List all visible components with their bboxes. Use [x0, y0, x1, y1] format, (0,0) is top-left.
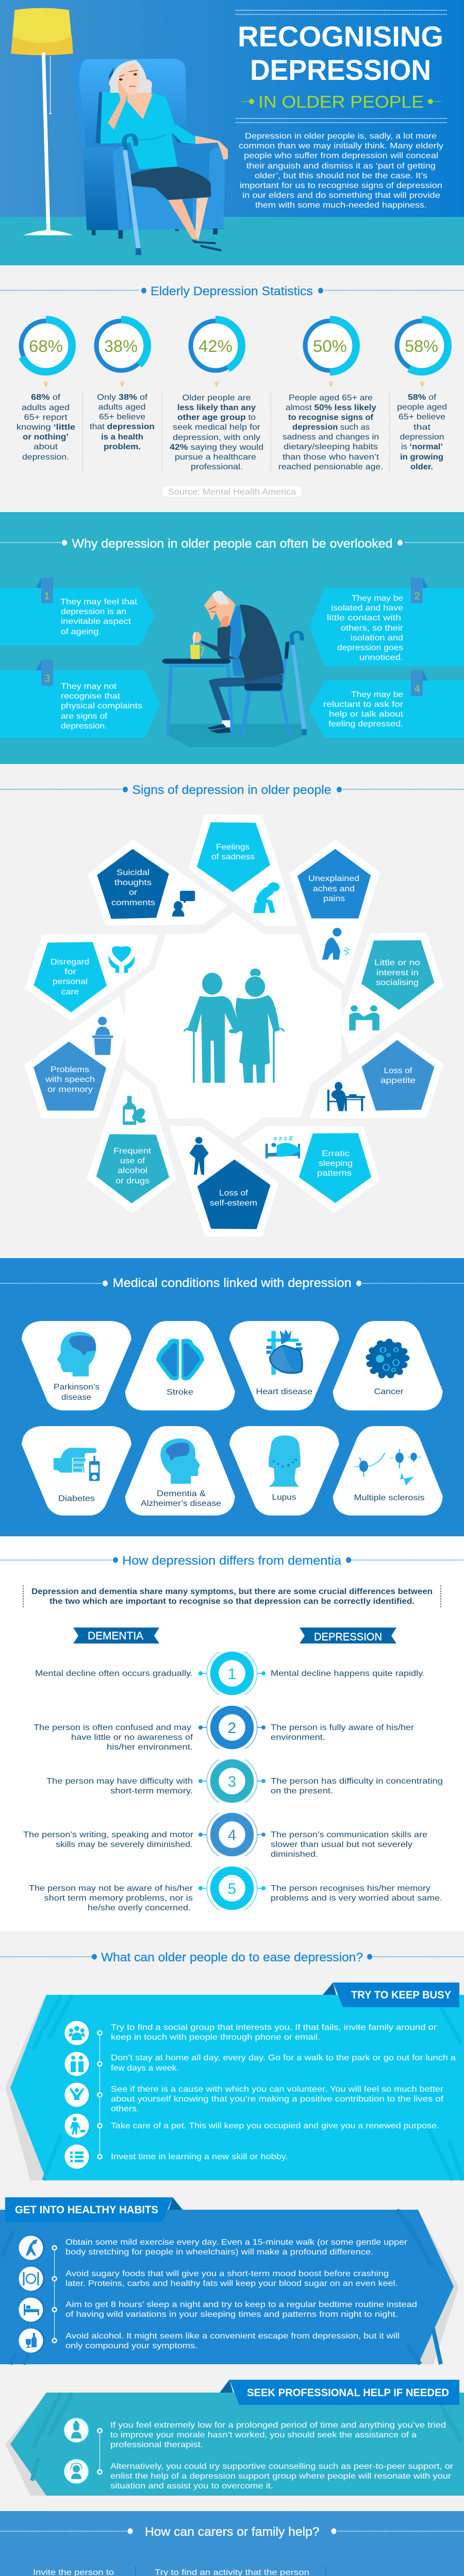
- stat text 2: problem.: [104, 443, 141, 451]
- reason 3 banner: 3: [45, 673, 50, 684]
- difference marker 2: 2: [228, 1720, 236, 1737]
- icon: counsellor with headset: [64, 2459, 90, 2484]
- dementia column text: short term memory problems, nor is: [44, 1894, 193, 1903]
- stat ring 68%: 68%: [29, 337, 63, 355]
- dementia ribbon: DEMENTIA: [88, 1630, 143, 1642]
- icon: walking companions: [65, 2052, 90, 2076]
- seek help tips: situation and assist you to overcome it.: [110, 2482, 273, 2490]
- stat text 1: about: [34, 443, 58, 451]
- intro paragraph: older’, but this should not be the case. It’s: [255, 172, 427, 180]
- reason 2 banner: isolated and have: [331, 604, 403, 613]
- icon: volunteer: [65, 2082, 90, 2107]
- reason 4 banner: help or talk about: [329, 710, 404, 719]
- stat text 4: depression such as: [292, 423, 370, 432]
- reason 3 banner: [0, 660, 160, 738]
- reason 4 banner: reluctant to ask for: [323, 700, 404, 709]
- medical condition labels: [54, 1383, 425, 1508]
- stat ring 58%: [395, 319, 448, 372]
- stat text 1: adults aged: [22, 403, 70, 412]
- dementia column text: have little or no awareness of: [71, 1733, 193, 1742]
- sign labels: of sadness: [211, 853, 255, 861]
- intro paragraph: Depression in older people is, sadly, a lot more: [245, 132, 437, 141]
- medical condition labels: Lupus: [272, 1493, 296, 1502]
- depression column text: The person’s communication skills are: [271, 1831, 427, 1839]
- sign labels: comments: [111, 899, 155, 907]
- intro paragraph: common than we may initially think. Many elderly: [239, 142, 443, 150]
- heading: elderly depression statistics: Elderly Depression Statistics: [151, 284, 313, 298]
- keep busy tips: keep in touch with people through phone or email.: [111, 2033, 320, 2042]
- depression column text: environment.: [271, 1733, 325, 1742]
- card: heart disease: [229, 1321, 339, 1411]
- sign labels: appetite: [380, 1076, 416, 1085]
- reason 4 banner: [309, 670, 464, 738]
- centre tile with older couple: [125, 912, 342, 1140]
- timeline nodes: [98, 2031, 102, 2159]
- reason 1 banner: inevitable aspect: [61, 617, 131, 626]
- header: title: [236, 10, 447, 123]
- medical condition labels: disease: [61, 1393, 91, 1402]
- stat text 4: sadness and changes in: [283, 433, 379, 442]
- seek help tips: enlist the help of a depression support group where people will resonate with your: [110, 2472, 452, 2481]
- source label: Source: Mental Health America: [168, 487, 296, 497]
- sign labels: Loss of: [384, 1066, 412, 1075]
- medical condition labels: Multiple sclerosis: [354, 1494, 425, 1502]
- keep busy tips: about yourself knowing that you’re making a positive contribution to the lives of: [111, 2095, 444, 2104]
- stat text 1: knowing ‘little: [16, 423, 75, 432]
- healthy habit tips: of having wild variations in your sleeping times and patterns from night to night.: [65, 2310, 398, 2319]
- sign labels: self-esteem: [210, 1199, 257, 1208]
- reason 2 banner: little contact with: [327, 614, 401, 622]
- reason 2 banner: depression goes: [337, 643, 403, 652]
- healthy habit tips: Obtain some mild exercise every day. Even a 15-minute walk (or some gentle upper: [65, 2238, 408, 2247]
- difference marker 3: [198, 1759, 266, 1803]
- stat text 3: 42% saying they would: [170, 443, 263, 452]
- stat text 1: 65+ report: [24, 413, 68, 422]
- intro statement: Depression and dementia share many symptoms, but there are some crucial differences between: [31, 1587, 433, 1596]
- depression column text: The person is fully aware of his/her: [271, 1723, 415, 1732]
- stat text 5: 65+ believe: [399, 413, 445, 421]
- heading: why overlooked: Why depression in older people can often be overlooked: [72, 537, 393, 551]
- reason 2 banner: [309, 578, 464, 666]
- icon: walking a pet: [65, 2113, 90, 2138]
- stat ring 42%: [189, 319, 242, 372]
- depression ribbon: DEPRESSION: [314, 1631, 382, 1643]
- dementia column text: [23, 1669, 194, 1912]
- intro paragraph: [239, 132, 443, 210]
- reason 1 banner: [0, 578, 155, 646]
- sign labels: with speech: [45, 1075, 95, 1084]
- timeline nodes: [53, 2246, 57, 2343]
- dementia column text: he/she overly concerned.: [88, 1904, 191, 1912]
- healthy habit tips: later. Proteins, carbs and healthy fats will keep your blood sugar on an even keel.: [65, 2279, 398, 2288]
- sign labels: Loss of: [219, 1189, 248, 1197]
- sign: loss of self-esteem: [169, 1126, 279, 1237]
- difference marker 3: 3: [228, 1773, 236, 1790]
- icon: therapist: [64, 2417, 90, 2443]
- stat text 1: or nothing’: [23, 433, 69, 442]
- healthy habit tips: Avoid sugary foods that will give you a short-term mood boost before crashing: [65, 2269, 389, 2278]
- sign: loss of appetite: [309, 1032, 443, 1118]
- reason 2 banner: unnoticed.: [359, 653, 403, 662]
- seek help tips: [110, 2421, 454, 2490]
- healthy habit tips: Avoid alcohol. It might seem like a convenient escape from depression, but it will: [65, 2332, 400, 2341]
- healthy habit tips: Aim to get 8 hours’ sleep a night and try to keep to a regular bedtime routine instead: [65, 2300, 417, 2309]
- sign labels: alcohol: [118, 1166, 147, 1175]
- sign labels: Feelings: [216, 843, 250, 852]
- stat text 5: in growing: [400, 453, 443, 462]
- sign labels: Erratic: [322, 1149, 350, 1158]
- medical condition labels: Dementia &: [157, 1489, 206, 1498]
- keep busy tips: Try to find a social group that interests you. If that fails, invite family around or: [111, 2023, 437, 2032]
- stat text 3: less likely than any: [177, 403, 256, 412]
- depression column text: Mental decline happens quite rapidly.: [271, 1669, 425, 1678]
- difference marker 4: 4: [228, 1827, 236, 1844]
- medical condition labels: Diabetes: [58, 1494, 95, 1503]
- sign labels: thoughts: [114, 878, 152, 887]
- tab: seek help: SEEK PROFESSIONAL HELP IF NEEDED: [247, 2387, 449, 2399]
- dementia column text: The person may not be aware of his/her: [29, 1884, 193, 1893]
- depression column text: problems and is very worried about same.: [271, 1894, 442, 1903]
- stat text 1: 68% of: [31, 393, 61, 402]
- stat text 2: Only 38% of: [97, 393, 148, 402]
- dementia column text: The person may have difficulty with: [46, 1777, 193, 1786]
- difference marker 4: [198, 1813, 266, 1856]
- sign labels: [45, 843, 420, 1208]
- sign labels: socialising: [376, 978, 419, 987]
- reason 1 banner: They may feel that: [60, 598, 138, 606]
- sign labels: Unexplained: [308, 874, 359, 883]
- sign labels: or drugs: [115, 1177, 150, 1185]
- card: multiple sclerosis: [333, 1426, 443, 1516]
- intro paragraph: their anguish and dismiss it as ‘part of getting: [246, 162, 436, 171]
- sign labels: Suicidal: [117, 869, 150, 877]
- reason 3 banner: recognise that: [61, 692, 121, 701]
- depression column text: slower than usual but not severely: [271, 1840, 412, 1849]
- tab: try to keep busy: TRY TO KEEP BUSY: [351, 1989, 451, 2001]
- stat text 2: is a health: [101, 433, 143, 442]
- stat text 4: dietary/sleeping habits: [284, 443, 378, 451]
- seek help tips: Alternatively, you could try supportive counselling such as peer-to-peer support, or: [110, 2462, 454, 2471]
- panel: healthy habits: [0, 2197, 459, 2364]
- title: recognising depression: [238, 20, 443, 86]
- sign: suicidal thoughts: [88, 839, 228, 926]
- dementia column text: his/her environment.: [107, 1743, 193, 1752]
- heading: depression vs dementia: [0, 1554, 464, 1568]
- intro statement: [23, 1585, 441, 1607]
- sign labels: Problems: [51, 1065, 89, 1074]
- intro paragraph: in our elders and do something that will provide: [242, 191, 440, 200]
- signs diagram: white tiles, pentagons and icons: [24, 815, 443, 1237]
- reason 3 banner: depression.: [61, 722, 107, 731]
- stat text 3: seek medical help for: [173, 423, 261, 432]
- reason 3 banner: physical complaints: [61, 702, 142, 710]
- stat text 3: pursue a healthcare: [175, 453, 256, 462]
- keep busy tips: Take care of a pet. This will keep you occupied and give you a renewed purpose.: [111, 2122, 439, 2130]
- stat text 2: adults aged: [98, 403, 145, 412]
- keep busy tips: Invest time in learning a new skill or hobby.: [111, 2153, 288, 2161]
- medical condition labels: Heart disease: [256, 1387, 312, 1396]
- heading: how can carers help: How can carers or family help?: [145, 2525, 320, 2539]
- sign: problems with speech or memory: [24, 996, 128, 1118]
- medical condition labels: Parkinson’s: [54, 1383, 100, 1392]
- seek help tips: professional therapist.: [110, 2441, 203, 2449]
- stat text 5: that: [413, 423, 431, 432]
- heading: what can older people do: What can older people do to ease depression?: [101, 1951, 363, 1964]
- keep busy tips: few days a week.: [111, 2064, 179, 2073]
- heading: signs of depression: [0, 783, 464, 797]
- dementia column text: The person’s writing, speaking and motor: [23, 1831, 194, 1839]
- depression column text: [271, 1669, 443, 1903]
- tab: try to keep busy: [323, 1982, 459, 2007]
- stat ring 38%: [95, 319, 147, 372]
- panel: try to keep busy: [5, 1982, 464, 2180]
- dementia ribbon: [73, 1628, 159, 1643]
- depression column text: diminished.: [271, 1850, 318, 1859]
- depression ribbon: [300, 1628, 396, 1643]
- reason 4 banner: They may be: [351, 690, 403, 699]
- sign labels: for: [64, 968, 77, 976]
- medical condition labels: Cancer: [374, 1387, 404, 1396]
- dementia column text: The person is often confused and may: [34, 1723, 191, 1732]
- stat text 4: reached pensionable age.: [278, 463, 383, 471]
- medical condition labels: Alzheimer’s disease: [141, 1499, 221, 1508]
- seek help tips: to improve your morale hasn’t worked, you should seek the assistance of a: [110, 2431, 417, 2439]
- icon: social group: [65, 2021, 90, 2045]
- heading: medical conditions: [0, 1276, 464, 1290]
- sign: erratic sleeping patterns: [241, 1126, 380, 1213]
- stat text 5: older.: [410, 463, 433, 471]
- stat text 4: than those who haven’t: [283, 453, 379, 462]
- medical condition labels: Stroke: [167, 1388, 193, 1397]
- depression column text: The person recognises his/her memory: [271, 1884, 430, 1893]
- healthy habit tips: only compound your symptoms.: [65, 2342, 197, 2350]
- sign labels: sleeping: [319, 1159, 353, 1168]
- stat text 5: is ‘normal’: [401, 443, 443, 451]
- sign: disregard for personal care: [25, 935, 159, 1021]
- stat text 1: depression.: [22, 453, 69, 462]
- intro paragraph: them with some much-needed happiness.: [255, 201, 427, 210]
- keep busy tips: Don’t stay at home all day, every day. Go for a walk to the park or go out for lunch a: [111, 2054, 456, 2062]
- reason 4 banner: 4: [415, 684, 420, 694]
- card: stroke: [125, 1321, 235, 1411]
- sign: little or no interest in socialising: [340, 933, 443, 1055]
- icon: healthy food: [19, 2266, 44, 2292]
- icon: wine: [19, 2328, 44, 2353]
- reason 4 banner: feeling depressed.: [328, 720, 403, 728]
- stat text 5: 58% of: [408, 393, 437, 402]
- card: diabetes: [22, 1426, 131, 1516]
- stat text 3: [170, 394, 263, 471]
- difference marker 1: [198, 1652, 266, 1695]
- sign labels: Little or no: [374, 958, 420, 968]
- sleeping z letters: z z z Z: [274, 1136, 293, 1142]
- stat text 5: [397, 393, 447, 471]
- intro paragraph: important for us to recognise signs of depression: [240, 181, 442, 190]
- seek help tips: If you feel extremely low for a prolonged period of time and anything you’ve tried: [110, 2421, 446, 2430]
- illustration: floor lamp: [11, 8, 73, 235]
- dementia column text: skills may be severely diminished.: [56, 1840, 193, 1849]
- title: recognising depression: DEPRESSION: [250, 54, 431, 86]
- stat text 3: other age group to: [177, 413, 256, 422]
- reason 1 banner: depression is an: [61, 607, 126, 616]
- sign labels: aches and: [313, 885, 355, 893]
- heading: what can older people do: [0, 1951, 464, 1964]
- stat text 5: people aged: [397, 403, 447, 412]
- sign labels: or: [129, 888, 138, 897]
- pointer triangles: [43, 381, 425, 387]
- stat text 3: depression, with only: [173, 433, 260, 442]
- stat text 4: almost 50% less likely: [286, 403, 376, 412]
- stat ring 50%: 50%: [313, 337, 347, 355]
- depression column text: The person has difficulty in concentrating: [271, 1777, 443, 1786]
- heading: how can carers help: [0, 2525, 464, 2539]
- panel: seek professional help: [5, 2380, 464, 2496]
- icon: checklist: [65, 2144, 90, 2169]
- title: recognising depression: RECOGNISING: [238, 20, 443, 53]
- heading: signs of depression: Signs of depression in older people: [132, 783, 331, 797]
- icon: bed: [19, 2297, 44, 2323]
- reason 1 banner: of ageing.: [61, 628, 101, 636]
- heading: elderly depression statistics: [0, 284, 464, 298]
- reason 1 banner: 1: [44, 591, 49, 602]
- sign labels: patterns: [317, 1169, 352, 1178]
- sign: feelings of sadness: [189, 815, 297, 926]
- stat text 5: depression: [400, 433, 444, 442]
- stat text 1: [16, 393, 75, 462]
- medical condition cards: [22, 1321, 443, 1516]
- card: parkinson's: [22, 1321, 131, 1411]
- intro statement: the two which are important to recognise so that depression can be correctly identified.: [49, 1597, 415, 1606]
- stat text 3: Older people are: [183, 394, 251, 402]
- heading: depression vs dementia: How depression differs from dementia: [122, 1554, 342, 1568]
- difference marker 1: 1: [228, 1666, 236, 1683]
- stat ring 42%: 42%: [198, 337, 233, 355]
- stat text 2: [90, 393, 155, 451]
- dementia column text: short-term memory.: [110, 1787, 193, 1795]
- card: dementia and alzheimer's: [125, 1426, 235, 1516]
- stat text 4: People aged 65+ are: [289, 394, 373, 402]
- subtitle: in older people: IN OLDER PEOPLE: [258, 92, 424, 111]
- sign labels: use of: [120, 1157, 145, 1165]
- keep busy tips: others.: [111, 2105, 139, 2113]
- stat ring 38%: 38%: [104, 337, 138, 355]
- card: cancer: [333, 1321, 443, 1411]
- stat text 3: professional.: [191, 463, 243, 471]
- sign: frequent use of alcohol or drugs: [87, 1069, 177, 1213]
- keep busy tips: [111, 2023, 456, 2161]
- sign labels: interest in: [376, 969, 419, 977]
- depression column text: on the present.: [271, 1787, 333, 1795]
- reason 2 banner: They may be: [352, 594, 403, 603]
- reason 2 banner: 2: [415, 591, 420, 602]
- stat text 2: 65+ believe: [99, 413, 145, 421]
- stat ring 68%: [20, 319, 72, 372]
- icon: exercise: [19, 2235, 44, 2261]
- difference marker 5: [198, 1867, 266, 1910]
- sign labels: or memory: [47, 1085, 93, 1094]
- timeline nodes: [98, 2429, 102, 2474]
- reason 2 banner: isolation and: [351, 634, 403, 642]
- keep busy tips: See if there is a cause with which you can volunteer. You will feel so much better: [111, 2085, 444, 2094]
- stat ring 50%: [304, 319, 356, 372]
- illustration: sad older woman in armchair: [72, 59, 228, 255]
- sign labels: pains: [323, 894, 345, 903]
- tab: healthy habits: [5, 2197, 183, 2222]
- healthy habit tips: [65, 2238, 417, 2350]
- intro paragraph: people who suffer from depression will conceal: [244, 151, 438, 160]
- reason 3 banner: They may not: [61, 682, 117, 691]
- stat text 2: that depression: [90, 422, 155, 431]
- dementia column text: Mental decline often occurs gradually.: [35, 1669, 193, 1678]
- tab: seek help: [220, 2380, 459, 2405]
- sign labels: personal: [53, 977, 88, 986]
- difference marker 2: [198, 1706, 266, 1749]
- tab: healthy habits: GET INTO HEALTHY HABITS: [15, 2204, 158, 2216]
- sign: unexplained aches: [289, 839, 380, 985]
- heading: why overlooked: [0, 537, 464, 551]
- difference marker 5: 5: [228, 1880, 236, 1897]
- sign labels: care: [61, 988, 79, 996]
- sign labels: Frequent: [113, 1147, 152, 1156]
- sign labels: Disregard: [51, 958, 89, 967]
- stat ring 58%: 58%: [405, 337, 438, 355]
- healthy habit tips: body stretching for people in wheelchairs) will make a profound difference.: [65, 2248, 373, 2257]
- heading: medical conditions: Medical conditions linked with depression: [113, 1276, 352, 1290]
- illustration: sad older man at table: [162, 591, 307, 747]
- reason 2 banner: others, so their: [341, 624, 404, 633]
- card: lupus: [229, 1426, 339, 1516]
- reason 3 banner: are signs of: [61, 712, 108, 721]
- stat text 4: to recognise signs of: [288, 413, 374, 422]
- stat text 4: [278, 394, 383, 471]
